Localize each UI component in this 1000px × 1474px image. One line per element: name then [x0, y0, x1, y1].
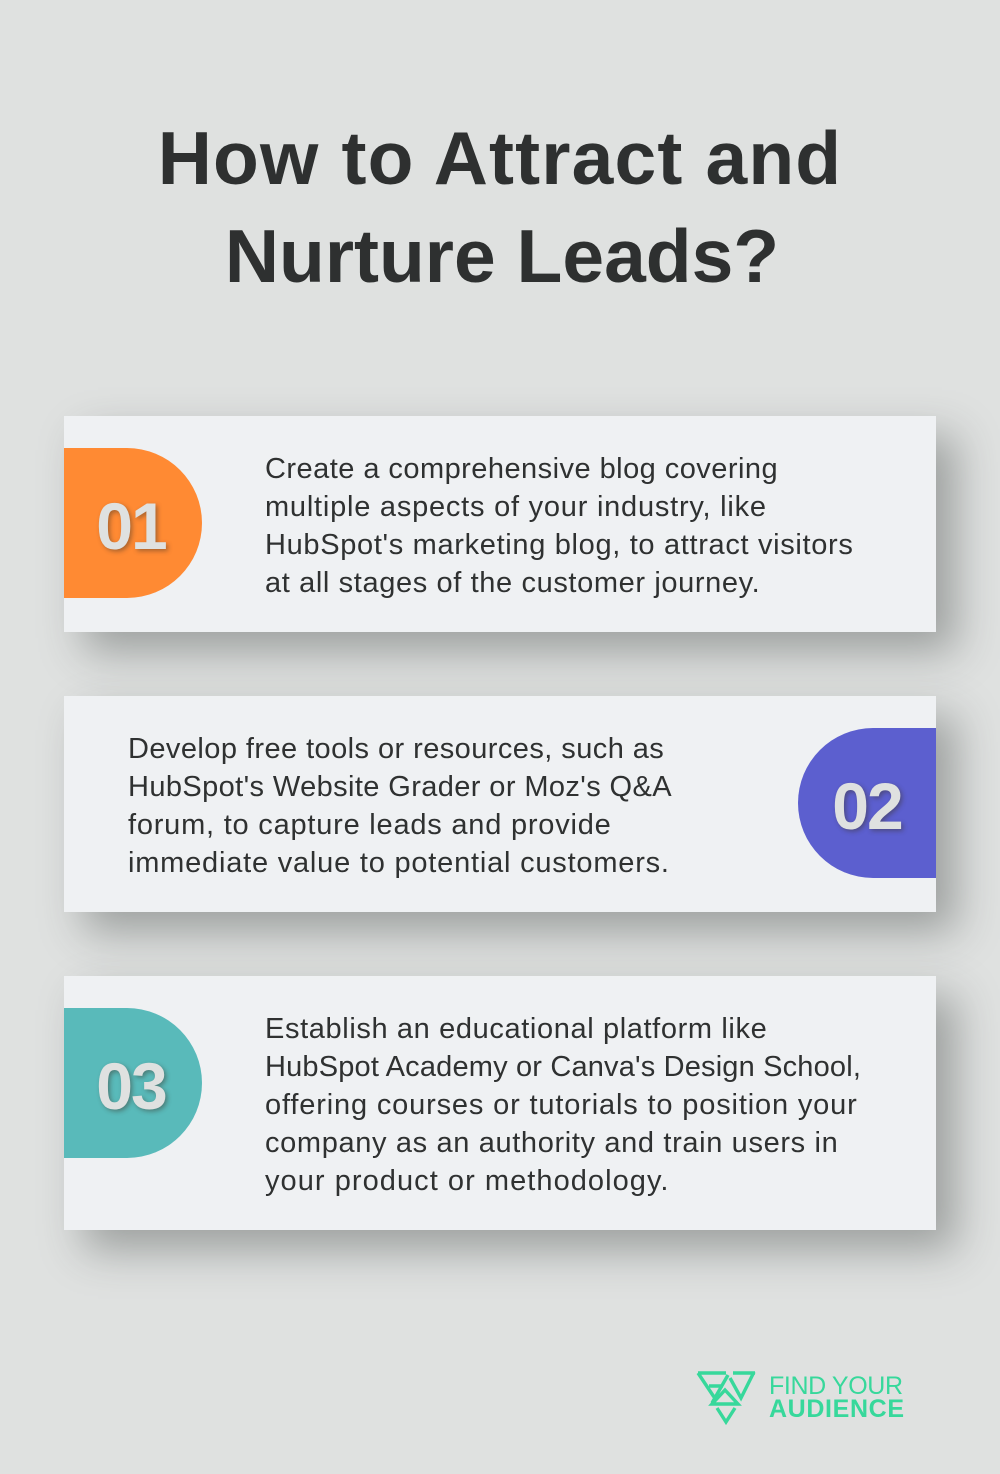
- text block 03: offering courses or tutorials to position your: [265, 1089, 858, 1121]
- panel: step 03: [64, 976, 936, 1230]
- text block 01: Create a comprehensive blog covering: [265, 453, 778, 485]
- badge 02: [798, 728, 936, 878]
- text block 02: [128, 733, 672, 879]
- text block 03: [265, 1013, 861, 1197]
- badge 02: 02: [832, 769, 902, 843]
- text block 01: multiple aspects of your industry, like: [265, 491, 767, 523]
- logo: Find Your Audience: [696, 1371, 904, 1425]
- text block 01: at all stages of the customer journey.: [265, 567, 760, 599]
- text block 02: forum, to capture leads and provide: [128, 809, 612, 841]
- badge 03: 03: [96, 1049, 166, 1123]
- badge 01: 01: [96, 489, 166, 563]
- text block 03: company as an authority and train users in: [265, 1127, 838, 1159]
- panel: step 02: [64, 696, 936, 912]
- icon: triangle mark: [698, 1372, 755, 1422]
- badge 01: [64, 448, 202, 598]
- title: How to Attract and: [158, 116, 842, 200]
- title: Nurture Leads?: [225, 214, 779, 298]
- title: [158, 116, 842, 298]
- text block 01: [265, 453, 854, 599]
- wordmark: [769, 1372, 904, 1423]
- text block 01: HubSpot's marketing blog, to attract visitors: [265, 529, 854, 561]
- wordmark: AUDIENCE: [769, 1395, 904, 1423]
- text block 02: Develop free tools or resources, such as: [128, 733, 664, 765]
- text block 02: HubSpot's Website Grader or Moz's Q&A: [128, 771, 672, 803]
- text block 03: HubSpot Academy or Canva's Design School,: [265, 1051, 861, 1083]
- wordmark: FIND YOUR: [769, 1372, 903, 1400]
- badge 03: [64, 1008, 202, 1158]
- text block 03: your product or methodology.: [265, 1165, 669, 1197]
- text block 02: immediate value to potential customers.: [128, 847, 670, 879]
- text block 03: Establish an educational platform like: [265, 1013, 767, 1045]
- panel: step 01: [64, 416, 936, 632]
